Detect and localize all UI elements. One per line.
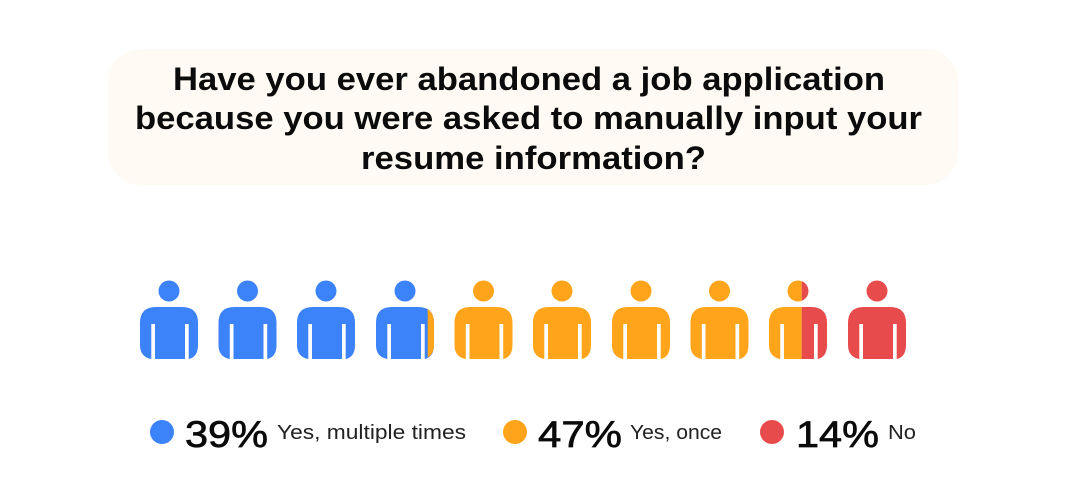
person 1: blue <box>140 280 198 359</box>
legend item: 39% yes, multiple times <box>150 414 466 455</box>
person 8: orange <box>690 280 748 359</box>
person 2: blue <box>218 280 276 359</box>
pictogram row of ten people <box>140 280 906 359</box>
person 4: blue with orange edge <box>376 280 434 359</box>
legend <box>150 414 916 455</box>
legend item: 39% yes, multiple times: Yes, multiple times <box>277 422 466 444</box>
legend item: 14% no: 14% <box>796 414 879 455</box>
person 3: blue <box>297 280 355 359</box>
question panel <box>108 49 958 185</box>
legend item: 14% no: No <box>888 422 916 444</box>
person 5: orange <box>454 280 512 359</box>
person 7: orange <box>612 280 670 359</box>
legend item: 39% yes, multiple times: 39% <box>185 414 268 455</box>
legend item: 47% yes, once: 47% <box>538 414 622 455</box>
question heading: because you were asked to manually input your <box>135 100 922 136</box>
question heading: Have you ever abandoned a job application <box>173 61 885 97</box>
person 6: orange <box>533 280 591 359</box>
legend item: 14% no <box>760 414 916 455</box>
question heading <box>135 61 922 176</box>
person 10: red <box>848 280 906 359</box>
legend item: 47% yes, once <box>503 414 722 455</box>
legend item: 47% yes, once: Yes, once <box>630 422 722 444</box>
question heading: resume information? <box>361 140 706 176</box>
person 9: orange and red split <box>769 280 827 359</box>
